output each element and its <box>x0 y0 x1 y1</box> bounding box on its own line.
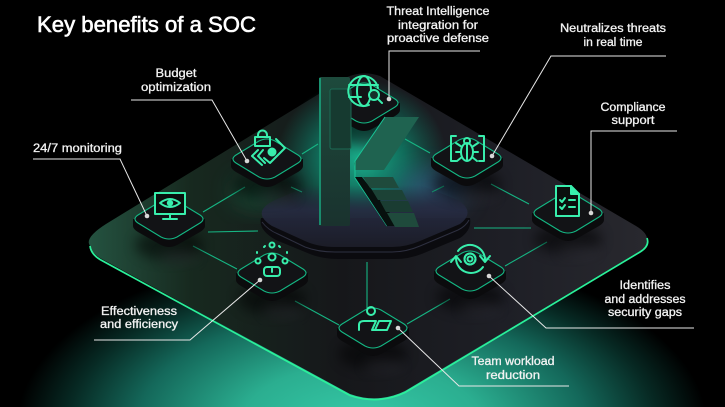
icon: bug in brackets <box>451 136 484 161</box>
label: budget optimization <box>141 68 211 94</box>
label: compliance support: Compliance <box>600 102 666 114</box>
label: neutralizes threats: in real time <box>584 37 642 49</box>
label: effectiveness <box>100 306 178 331</box>
icon: lock and money <box>252 130 285 165</box>
label: compliance support <box>600 102 666 127</box>
budget tile <box>231 139 303 204</box>
central glow <box>277 80 447 236</box>
title: Key benefits of a SOC <box>37 12 256 37</box>
label: compliance support: support <box>612 115 655 127</box>
label: team workload: reduction <box>486 370 540 382</box>
label: threat intelligence: proactive defense <box>387 33 489 45</box>
label: team workload: Team workload <box>472 356 554 368</box>
label: threat intelligence: Threat Intelligence <box>386 6 490 18</box>
label: 24/7 monitoring: 24/7 monitoring <box>33 143 122 155</box>
label: effectiveness: Effectiveness <box>101 306 177 318</box>
connector lines <box>193 139 547 325</box>
label: team workload <box>472 356 554 382</box>
icon: person and laptop <box>359 307 391 330</box>
logo K <box>319 77 419 227</box>
icon: globe search <box>348 76 382 106</box>
label: neutralizes threats <box>560 23 666 49</box>
icon: checklist document <box>556 186 579 216</box>
background glow <box>0 230 725 407</box>
label: identifies gaps: security gaps <box>608 307 682 319</box>
label: effectiveness: and efficiency <box>100 319 178 331</box>
threat intelligence tile <box>328 83 400 148</box>
label: identifies gaps: and addresses <box>604 294 686 306</box>
label: identifies gaps: Identifies <box>620 280 671 292</box>
security gaps tile <box>434 251 506 316</box>
team workload tile <box>337 308 409 373</box>
platform <box>89 73 648 400</box>
label: budget optimization: Budget <box>156 68 197 80</box>
icon: people network <box>256 242 288 276</box>
icon: gear with arrows <box>451 245 490 273</box>
neutralizes tile <box>431 138 503 203</box>
effectiveness tile <box>236 253 308 318</box>
label: threat intelligence: integration for <box>398 20 478 32</box>
icon: monitor with eye <box>155 193 185 219</box>
monitoring tile <box>133 199 205 264</box>
central hub <box>261 185 470 259</box>
label: threat intelligence <box>386 6 490 45</box>
label: budget optimization: optimization <box>141 82 211 94</box>
label: neutralizes threats: Neutralizes threats <box>560 23 666 35</box>
callout lines <box>33 51 694 386</box>
compliance tile <box>532 193 604 258</box>
label: identifies gaps <box>604 280 686 319</box>
